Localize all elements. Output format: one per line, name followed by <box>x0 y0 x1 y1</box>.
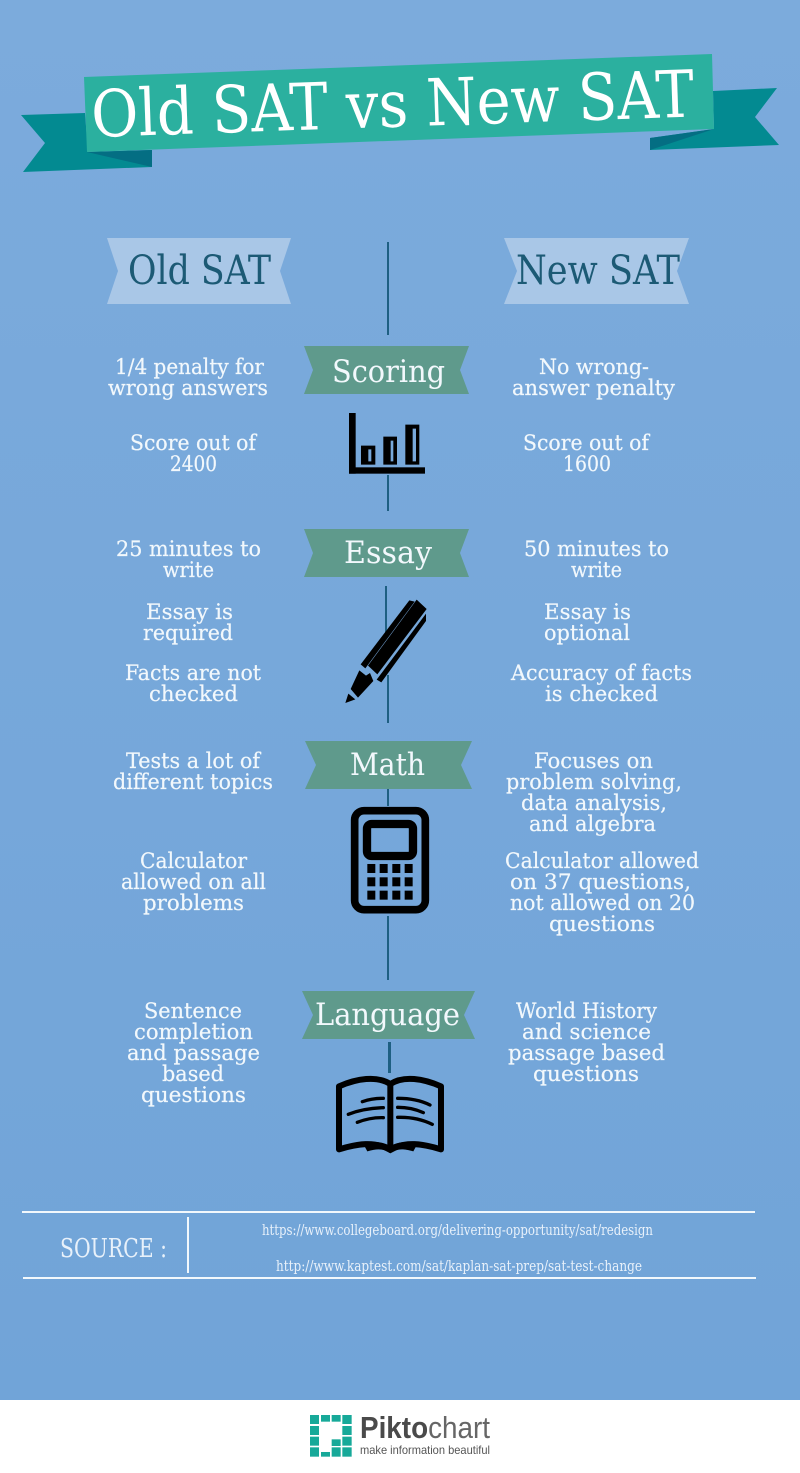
old SAT language text <box>127 999 260 1107</box>
new SAT scoring text: Score out of <box>523 431 651 455</box>
new SAT math text: questions <box>549 912 655 936</box>
new SAT language text: World History <box>516 999 657 1023</box>
center timeline lines <box>385 242 391 1073</box>
icon: calculator <box>355 811 425 910</box>
icon: bar chart <box>349 413 425 474</box>
old SAT math text: problems <box>143 891 244 915</box>
old SAT math text: Calculator <box>140 849 248 873</box>
old SAT scoring text: 1/4 penalty for <box>115 355 265 379</box>
new SAT scoring text: 1600 <box>563 452 611 476</box>
old SAT math text: allowed on all <box>121 870 266 894</box>
old SAT math text <box>113 749 273 915</box>
title banner <box>21 54 779 172</box>
title: Old SAT vs New SAT <box>90 58 695 153</box>
new SAT essay text: Essay is <box>544 600 631 624</box>
new SAT scoring text <box>512 355 675 476</box>
new SAT math text: not allowed on 20 <box>510 891 695 915</box>
column heading: New SAT: New SAT <box>516 248 680 294</box>
new SAT language text <box>508 999 665 1086</box>
column heading: Old SAT: Old SAT <box>128 248 271 294</box>
new SAT essay text: write <box>571 558 622 582</box>
old SAT scoring text: 2400 <box>170 452 217 476</box>
new SAT math text <box>505 749 699 936</box>
banner band <box>84 54 714 152</box>
icon: open book <box>339 1079 441 1153</box>
section heading: Math: Math <box>350 747 425 783</box>
right banner fold <box>650 129 714 150</box>
new SAT math text: and algebra <box>529 812 656 836</box>
section heading: Language <box>302 991 475 1039</box>
new SAT essay text: Accuracy of facts <box>510 661 692 685</box>
old SAT essay text <box>116 537 262 706</box>
logo mark <box>310 1415 352 1457</box>
new SAT essay text: optional <box>544 621 630 645</box>
old SAT essay text: Essay is <box>146 600 233 624</box>
old SAT language text: based <box>162 1062 224 1086</box>
column heading: New SAT <box>504 238 689 304</box>
new SAT math text: data analysis, <box>521 791 667 815</box>
old SAT language text: and passage <box>127 1041 260 1065</box>
left banner tail <box>21 113 152 172</box>
icon: pencil <box>345 600 427 703</box>
left banner fold <box>87 150 152 167</box>
old SAT language text: Sentence <box>144 999 242 1023</box>
section heading: Essay <box>304 529 469 577</box>
old SAT scoring text: Score out of <box>130 431 258 455</box>
new SAT math text: Focuses on <box>534 749 653 773</box>
logo wordmark: Piktochart <box>360 1410 490 1445</box>
footer: Piktochart <box>0 1400 800 1473</box>
new SAT language text: and science <box>522 1020 651 1044</box>
new SAT language text: passage based <box>508 1041 665 1065</box>
section heading: Language: Language <box>315 997 460 1033</box>
section heading: Math <box>305 741 472 789</box>
source link 2: http://www.kaptest.com/sat/kaplan-sat-prep/sat-test-change <box>276 1257 642 1275</box>
section heading: Scoring <box>304 346 469 394</box>
old SAT math text: different topics <box>113 770 273 794</box>
new SAT essay text: 50 minutes to <box>524 537 669 561</box>
old SAT scoring text: wrong answers <box>108 376 268 400</box>
old SAT essay text: write <box>163 558 214 582</box>
new SAT scoring text: No wrong- <box>539 355 649 379</box>
old SAT language text: questions <box>141 1083 246 1107</box>
column heading: Old SAT <box>107 238 291 304</box>
old SAT math text: Tests a lot of <box>126 749 262 773</box>
new SAT language text: questions <box>533 1062 639 1086</box>
old SAT essay text: Facts are not <box>125 661 262 685</box>
logo tagline: make information beautiful <box>360 1443 490 1457</box>
new SAT scoring text: answer penalty <box>512 376 675 400</box>
right banner tail <box>650 88 779 150</box>
old SAT scoring text <box>108 355 268 476</box>
section heading: Scoring: Scoring <box>332 354 445 390</box>
source label: SOURCE : <box>60 1234 167 1264</box>
new SAT math text: Calculator allowed <box>505 849 699 873</box>
old SAT essay text: 25 minutes to <box>116 537 261 561</box>
source link 1: https://www.collegeboard.org/delivering-opportunity/sat/redesign <box>262 1221 653 1239</box>
old SAT essay text: required <box>143 621 233 645</box>
new SAT essay text: is checked <box>545 682 658 706</box>
old SAT language text: completion <box>134 1020 253 1044</box>
new SAT math text: on 37 questions, <box>510 870 691 894</box>
source section <box>22 1211 756 1279</box>
new SAT essay text <box>510 537 692 706</box>
old SAT essay text: checked <box>149 682 238 706</box>
section heading: Essay: Essay <box>344 535 432 571</box>
new SAT math text: problem solving, <box>506 770 682 794</box>
